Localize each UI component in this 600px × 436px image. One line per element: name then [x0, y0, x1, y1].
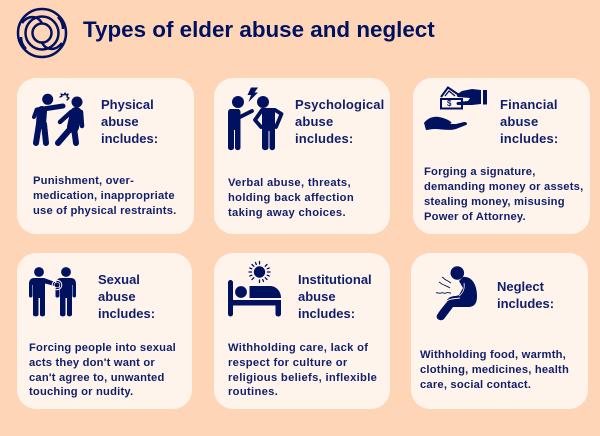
text: Withholding food, warmth, — [420, 349, 566, 361]
panel: sexual abuse — [17, 253, 192, 409]
text: care, social contact. — [420, 379, 531, 391]
text: can't agree to, unwanted — [29, 372, 165, 384]
heading: includes: — [101, 131, 158, 146]
text: religious beliefs, inflexible — [228, 372, 377, 384]
heading: abuse — [98, 289, 136, 304]
heading: includes: — [500, 131, 558, 146]
text: holding back affection — [228, 192, 354, 204]
panel: physical abuse — [17, 78, 194, 234]
text — [424, 166, 583, 223]
title: Types of elder abuse and neglect — [83, 17, 435, 42]
panel: financial abuse — [413, 78, 590, 234]
text: clothing, medicines, health — [420, 364, 569, 376]
text: stealing money, misusing — [424, 196, 565, 208]
text: Power of Attorney. — [424, 211, 526, 223]
heading: includes: — [298, 306, 355, 321]
heading — [497, 279, 554, 311]
heading: Psychological — [295, 97, 384, 112]
text: medication, inappropriate — [33, 190, 175, 202]
text: touching or nudity. — [29, 386, 133, 398]
text: use of physical restraints. — [33, 205, 176, 217]
panel: institutional abuse — [214, 253, 390, 409]
logo — [16, 8, 68, 58]
heading: abuse — [500, 114, 538, 129]
text — [228, 177, 354, 219]
text: Forcing people into sexual — [29, 342, 176, 354]
text: taking away choices. — [228, 207, 346, 219]
icon: person hitting another person — [32, 92, 84, 146]
icon: two people arguing with lightning bolt — [228, 88, 284, 150]
text: Verbal abuse, threats, — [228, 177, 351, 189]
heading — [298, 272, 372, 321]
icon: dollar sign: $ — [447, 99, 451, 108]
heading: Neglect — [497, 279, 544, 294]
text — [33, 175, 176, 217]
text: acts they don't want or — [29, 357, 155, 369]
text: Withholding care, lack of — [228, 342, 368, 354]
text: Punishment, over- — [33, 175, 134, 187]
text — [29, 342, 176, 398]
text: routines. — [228, 386, 278, 398]
text: respect for culture or — [228, 357, 348, 369]
heading — [500, 97, 558, 146]
text — [420, 349, 569, 391]
heading: includes: — [497, 296, 554, 311]
heading: abuse — [295, 114, 333, 129]
icon: hunched person shivering — [436, 266, 477, 320]
heading — [98, 272, 155, 321]
panel: neglect — [411, 253, 588, 409]
text — [228, 342, 377, 398]
heading — [295, 97, 384, 146]
heading — [101, 97, 158, 146]
heading: abuse — [101, 114, 139, 129]
heading: Financial — [500, 97, 558, 112]
heading: Sexual — [98, 272, 140, 287]
text: demanding money or assets, — [424, 181, 583, 193]
heading: includes: — [295, 131, 353, 146]
text: Forging a signature, — [424, 166, 536, 178]
icon: person touching another person — [29, 267, 76, 316]
heading: Institutional — [298, 272, 372, 287]
heading: includes: — [98, 306, 155, 321]
heading: Physical — [101, 97, 154, 112]
panel: psychological abuse — [214, 78, 390, 234]
heading: abuse — [298, 289, 336, 304]
icon: person in bed under sun — [228, 260, 281, 316]
icon: hand passing money to hand — [424, 86, 487, 130]
